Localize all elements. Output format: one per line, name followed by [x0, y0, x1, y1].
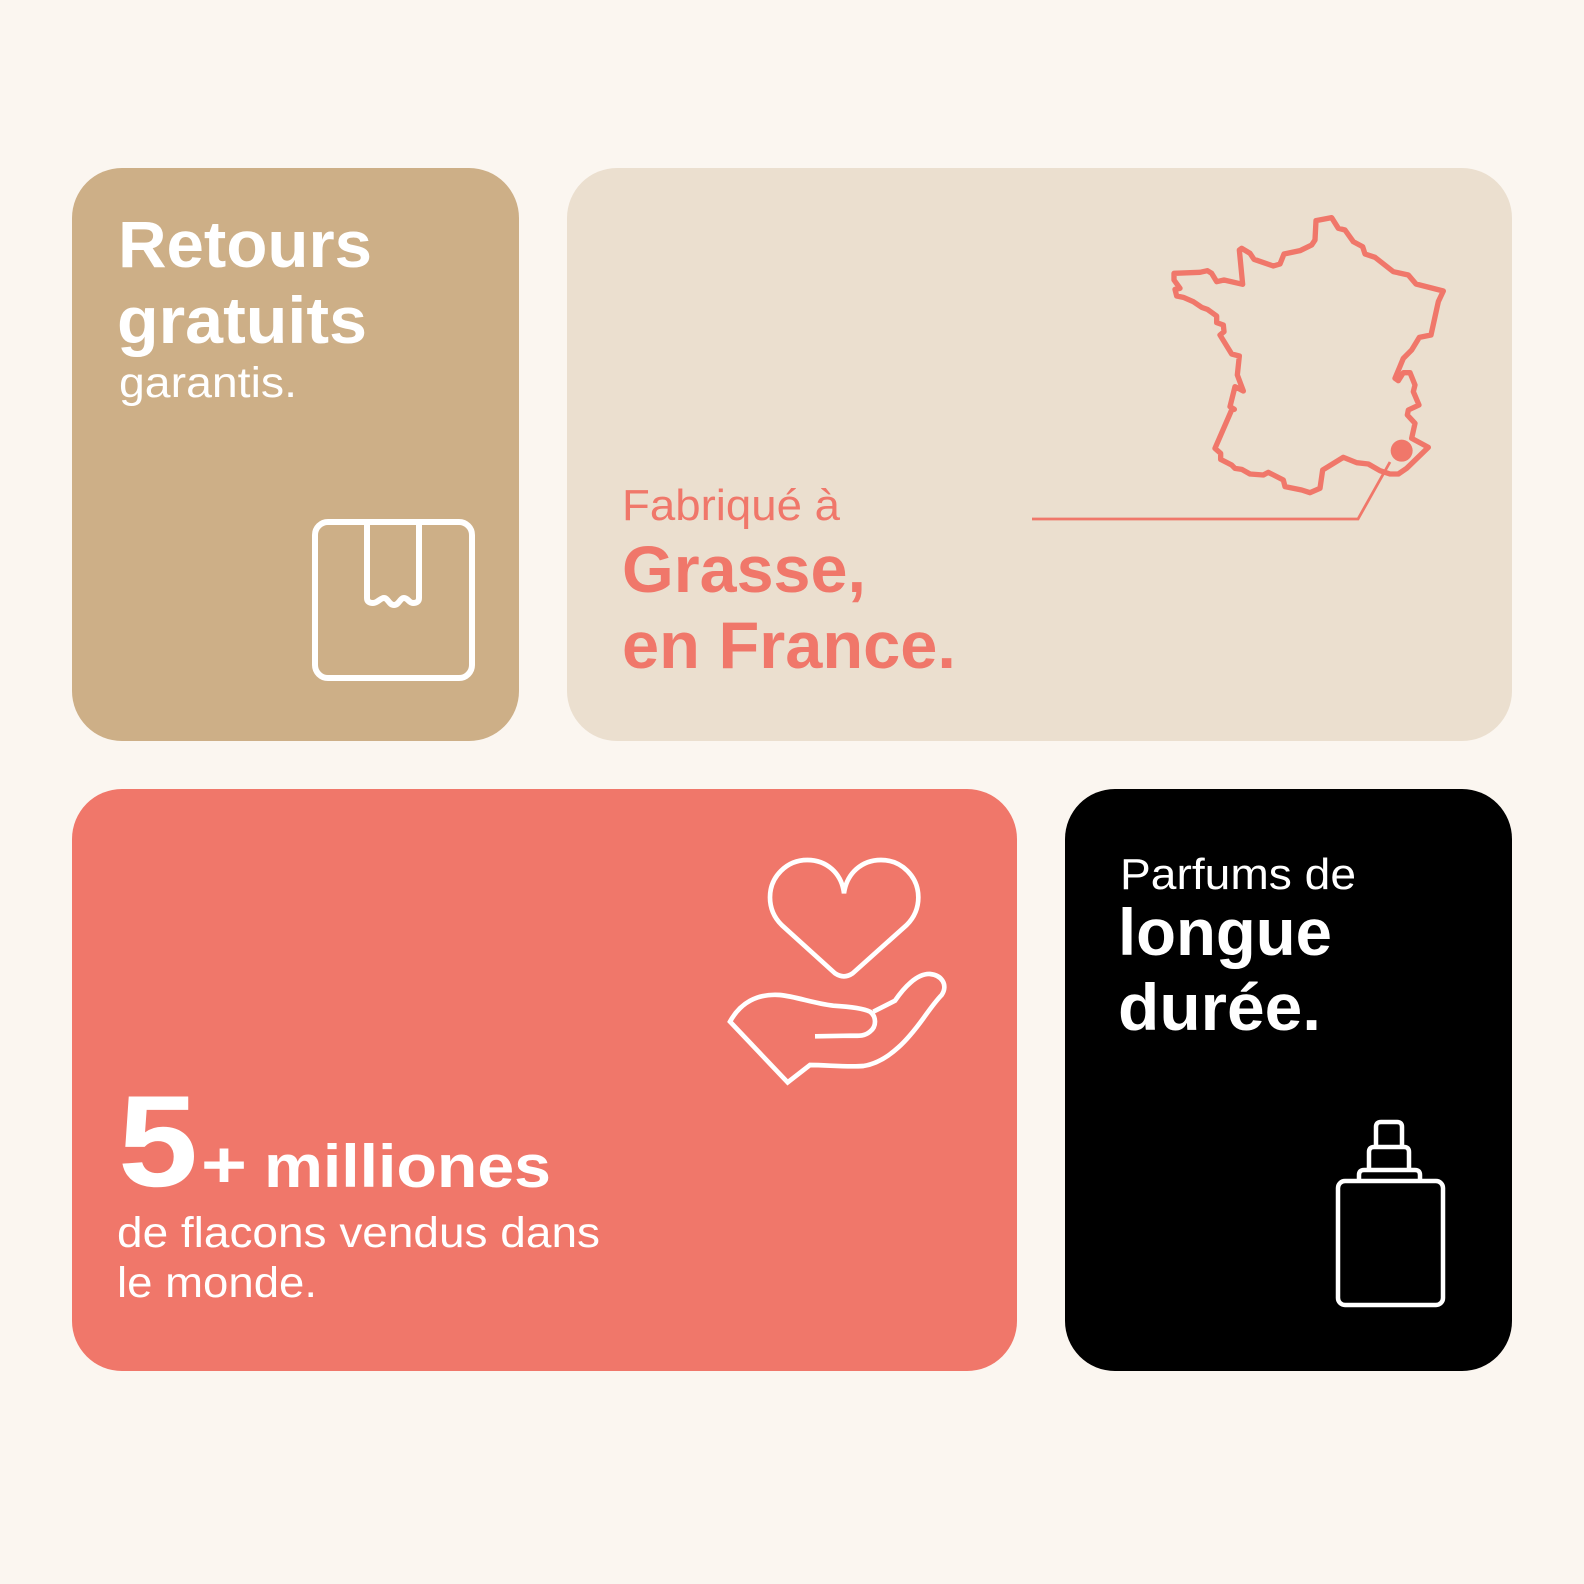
heading: parfums de longue durée: Parfums de: [1120, 850, 1356, 899]
heading: parfums de longue durée: [1118, 850, 1356, 1044]
stat: 5+ milliones: +: [201, 1127, 247, 1201]
heading: fabriqué à Grasse, en France: Fabriqué à: [622, 481, 841, 530]
panel: longue durée: [1065, 789, 1512, 1371]
heading: parfums de longue durée: durée.: [1118, 970, 1321, 1044]
heading: retours gratuits: garantis.: [119, 359, 297, 407]
heading: fabriqué à Grasse, en France: Grasse,: [622, 532, 866, 606]
icon: map of France: [1174, 218, 1443, 493]
marker: Grasse: [1391, 440, 1413, 462]
text: de flacons vendus dans le monde: de flacons vendus dans: [117, 1209, 600, 1257]
text: de flacons vendus dans le monde: [117, 1209, 600, 1307]
panel: retours gratuits: [72, 168, 519, 741]
icon: box: [315, 521, 472, 678]
stat: 5+ milliones: 5: [118, 1068, 198, 1214]
text: de flacons vendus dans le monde: le monde.: [117, 1259, 317, 1307]
stat: 5+ milliones: milliones: [264, 1133, 551, 1200]
heading: retours gratuits: gratuits: [117, 283, 367, 357]
heading: parfums de longue durée: longue: [1118, 895, 1332, 969]
panel: fabriqué à Grasse: [567, 168, 1512, 741]
icon: perfume bottle: [1338, 1122, 1443, 1305]
heading: retours gratuits: Retours: [118, 207, 372, 281]
heading: retours gratuits: [117, 207, 372, 407]
heading: fabriqué à Grasse, en France: en France.: [622, 608, 956, 682]
heading: fabriqué à Grasse, en France: [622, 481, 956, 682]
stat: 5+ milliones: [118, 1068, 551, 1214]
leader line: [1032, 462, 1390, 519]
icon: heart in hand: [730, 860, 944, 1082]
panel: 5+ milliones: [72, 789, 1017, 1371]
